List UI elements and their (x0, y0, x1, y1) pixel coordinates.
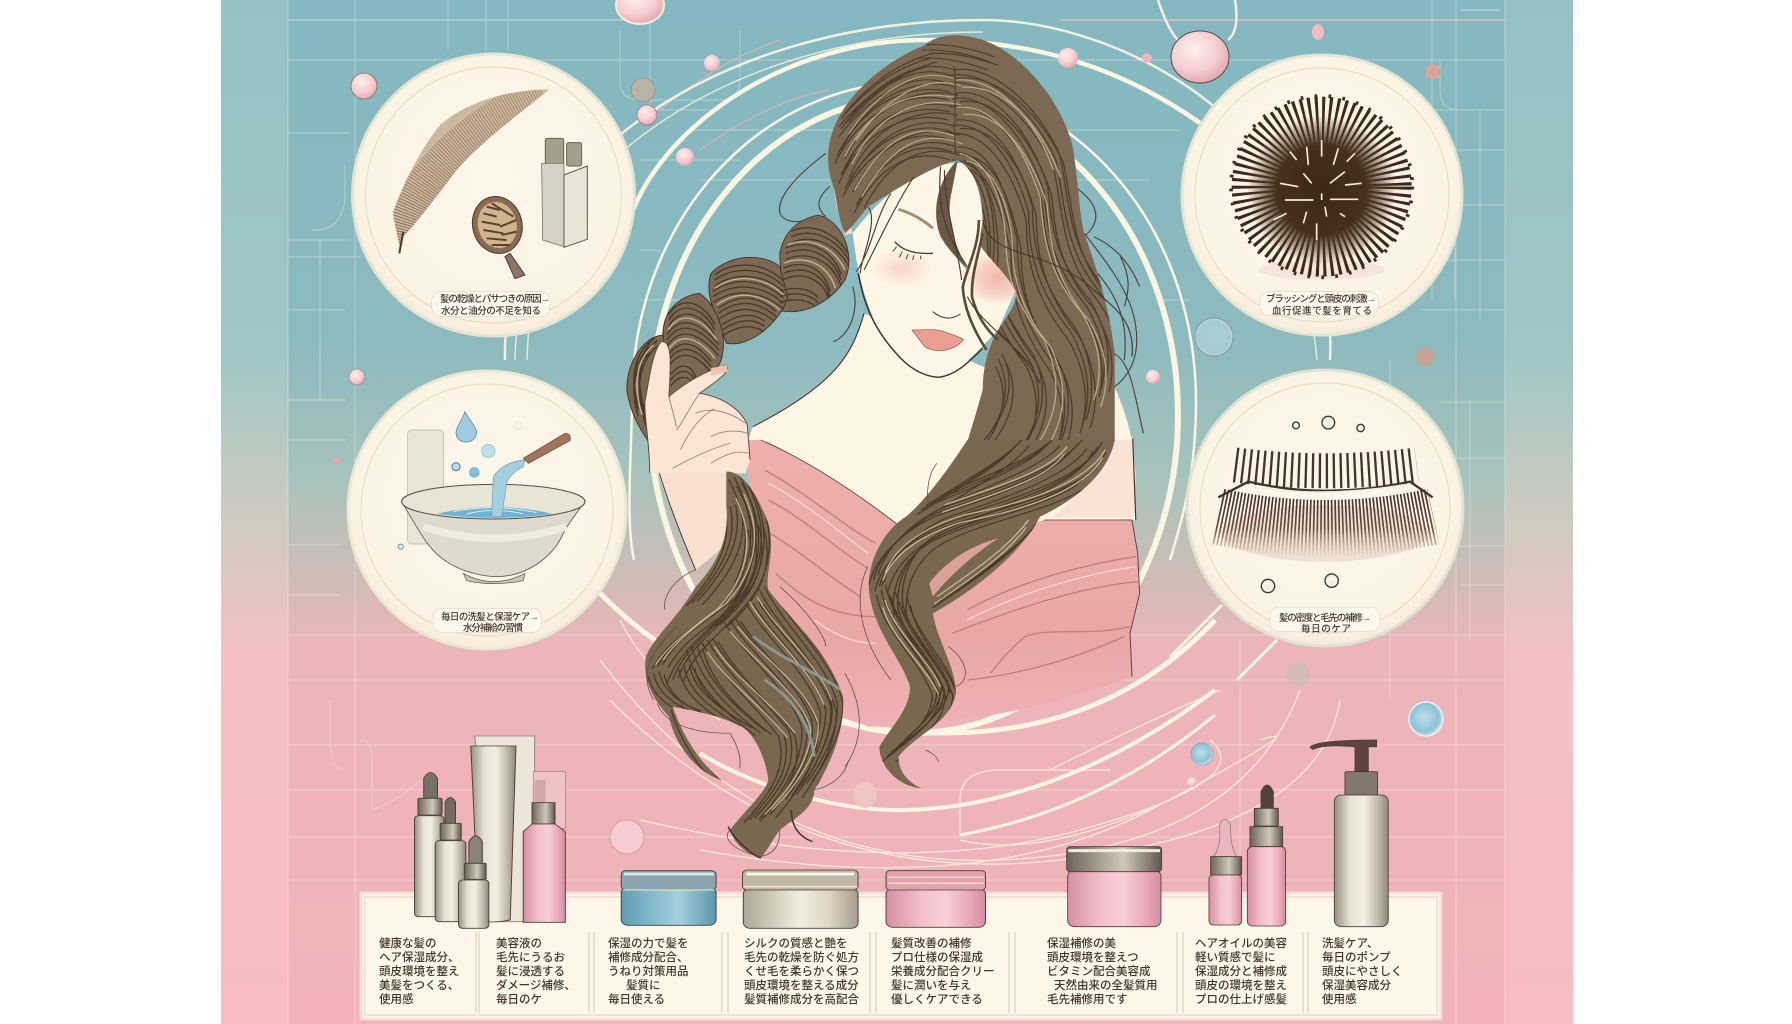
head, crown hair, braid and hand (627, 35, 1143, 473)
dropper bottle A (415, 772, 444, 917)
caption pill (1260, 292, 1378, 316)
caption text: 髪の乾燥とパサつきの原因→ (440, 293, 550, 305)
beige jar (743, 870, 858, 928)
background: right side strip (1505, 0, 1573, 1024)
forearm (648, 438, 751, 570)
text: column 8: 毎日のポンプ (1322, 950, 1391, 964)
product group: left bottles and tubes (415, 736, 565, 928)
parting (954, 67, 956, 153)
hair strands: crown (834, 44, 1113, 440)
caption text: 水分補給の習慣 (463, 622, 523, 634)
text: column 2: 毛先にうるお (496, 950, 565, 964)
eye and brow (893, 209, 961, 318)
small pink dropper (1209, 819, 1242, 925)
bubbles and pearls: floating decorations (332, 0, 1443, 854)
text: column 7: ヘアオイルの美容 (1195, 936, 1287, 950)
text: column 4: 頭皮環境を整える成分 (744, 978, 859, 992)
braid strands (634, 228, 849, 426)
bangs over the face (936, 160, 969, 273)
text: column 4: 髪質補修成分を高配合 (744, 992, 859, 1006)
caption text: 血行促進で髪を育てる (1272, 305, 1372, 317)
rings: concentric frame around the woman (505, 20, 1340, 868)
panel: top-right circle, hair brush ball (1182, 55, 1462, 335)
icon: small bubbles (1261, 416, 1364, 593)
text: column 6: 毛先補修用です (1047, 992, 1128, 1006)
text: column 2: 髪に浸透する (496, 964, 565, 978)
text: column 4: シルクの質感と艶を (744, 936, 848, 950)
pink lidded jar (1067, 847, 1162, 927)
text: column 1: 頭皮環境を整え (379, 964, 460, 978)
text: column 5: 栄養成分配合クリー (891, 964, 994, 978)
product group: right jar and bottles (1067, 740, 1388, 927)
ear (833, 174, 853, 235)
text: column 6: 天然由来の全髪質用 (1054, 978, 1158, 992)
hair back wisps (779, 153, 1143, 433)
text: column 8: 保湿美容成分 (1322, 978, 1391, 992)
hair crown mass (828, 35, 1115, 442)
product group: three jars (621, 870, 986, 928)
panel: top-left circle, dry hair (352, 54, 634, 336)
dropper bottle B (435, 797, 466, 922)
text: column 1: 美髪をつくる、 (379, 978, 459, 992)
lower skin and pink wrap (648, 437, 1140, 727)
panel: bottom-right circle, comb and fringe (1187, 370, 1463, 646)
figure: woman with long hair (627, 35, 1143, 858)
neck and chest skin (747, 313, 1132, 442)
background: left side strip (221, 0, 288, 1024)
text: column 1: 健康な髪の (379, 936, 436, 950)
caption text: 髪の密度と毛先の補修→ (1279, 612, 1371, 624)
text: column 2: ダメージ補修、 (496, 978, 576, 992)
icon: brush (466, 191, 528, 279)
text: column 6: 保湿補修の美 (1047, 936, 1116, 950)
text: column 5: 優しくケアできる (891, 992, 983, 1006)
pink jar (886, 871, 986, 927)
caption text: 毎日のケア (1301, 623, 1351, 635)
icon: pouring spoon (492, 433, 570, 517)
text: column 6: ビタミン配合美容成 (1047, 964, 1151, 978)
panel: bottom-left circle, water bowl (348, 371, 626, 649)
icon: bowl (402, 484, 585, 584)
text: column 3: 補修成分配合、 (608, 950, 688, 964)
text: column 3: 保湿の力で髪を (608, 936, 688, 950)
text: column 4: 毛先の乾燥を防ぐ処方 (744, 950, 859, 964)
text: column 8: 洗髪ケア、 (1322, 936, 1378, 950)
text: column 2: 美容液の (496, 936, 542, 950)
braid (627, 215, 849, 443)
text: column 3: 毎日使える (608, 992, 665, 1006)
right hair lock (860, 435, 1115, 788)
text: column 7: 軽い質感で髪に (1195, 950, 1276, 964)
face (853, 163, 1017, 377)
caption text: ブラッシングと頭皮の刺激→ (1266, 293, 1376, 305)
text: column 1: ヘア保湿成分、 (379, 950, 460, 964)
text: column 7: 保湿成分と補修成 (1195, 964, 1287, 978)
text: column 6: 頭皮環境を整えつ (1047, 950, 1139, 964)
caption pill (432, 292, 550, 317)
pump bottle (1310, 740, 1388, 927)
text: column 5: 髪質改善の補修 (891, 936, 972, 950)
pink wrap (747, 440, 1140, 727)
icon: water drops (398, 412, 522, 549)
caption text: 水分と油分の不足を知る (441, 305, 541, 317)
text: column 5: プロ仕様の保湿成 (891, 950, 983, 964)
dropper bottle C (459, 836, 489, 928)
text: column 2: 毎日のケ (496, 992, 542, 1006)
text: column 7: 頭皮の環境を整え (1195, 978, 1287, 992)
icon: bottle (542, 138, 587, 247)
loose front strands (967, 220, 1132, 383)
caption pill (433, 608, 542, 632)
hand (645, 342, 750, 473)
caption pill (1270, 607, 1380, 631)
text: column 5: 髪に潤いを与え (891, 978, 972, 992)
text: column 8: 頭皮にやさしく (1322, 965, 1402, 978)
icon: jar behind bowl (408, 430, 444, 544)
icon: comb (1218, 465, 1433, 562)
front tube (471, 746, 516, 922)
text: column 8: 使用感 (1322, 992, 1357, 1006)
text: column 4: くせ毛を柔らかく保つ (744, 964, 859, 978)
pink pump bottle (523, 772, 565, 922)
icon: feather (393, 89, 549, 253)
lips (912, 330, 964, 351)
panel: bottom product description table (361, 893, 1441, 1019)
background: gradient page (221, 0, 1573, 1024)
text: column 1: 使用感 (379, 992, 414, 1006)
hanging hair locks (645, 435, 1115, 858)
right shoulder and neckline skin (753, 437, 1136, 540)
icon: bristle ball (1231, 96, 1412, 280)
caption text: 毎日の洗髪と保湿ケア→ (441, 611, 539, 623)
left hair lock (645, 472, 859, 858)
text: column 7: プロの仕上げ感髪 (1195, 992, 1287, 1006)
text: column 3: 髪質に (626, 978, 660, 992)
text: column 3: うねり対策用品 (608, 964, 688, 978)
tall pink dropper (1247, 785, 1286, 926)
blue jar (621, 871, 716, 925)
back tube (475, 736, 535, 922)
